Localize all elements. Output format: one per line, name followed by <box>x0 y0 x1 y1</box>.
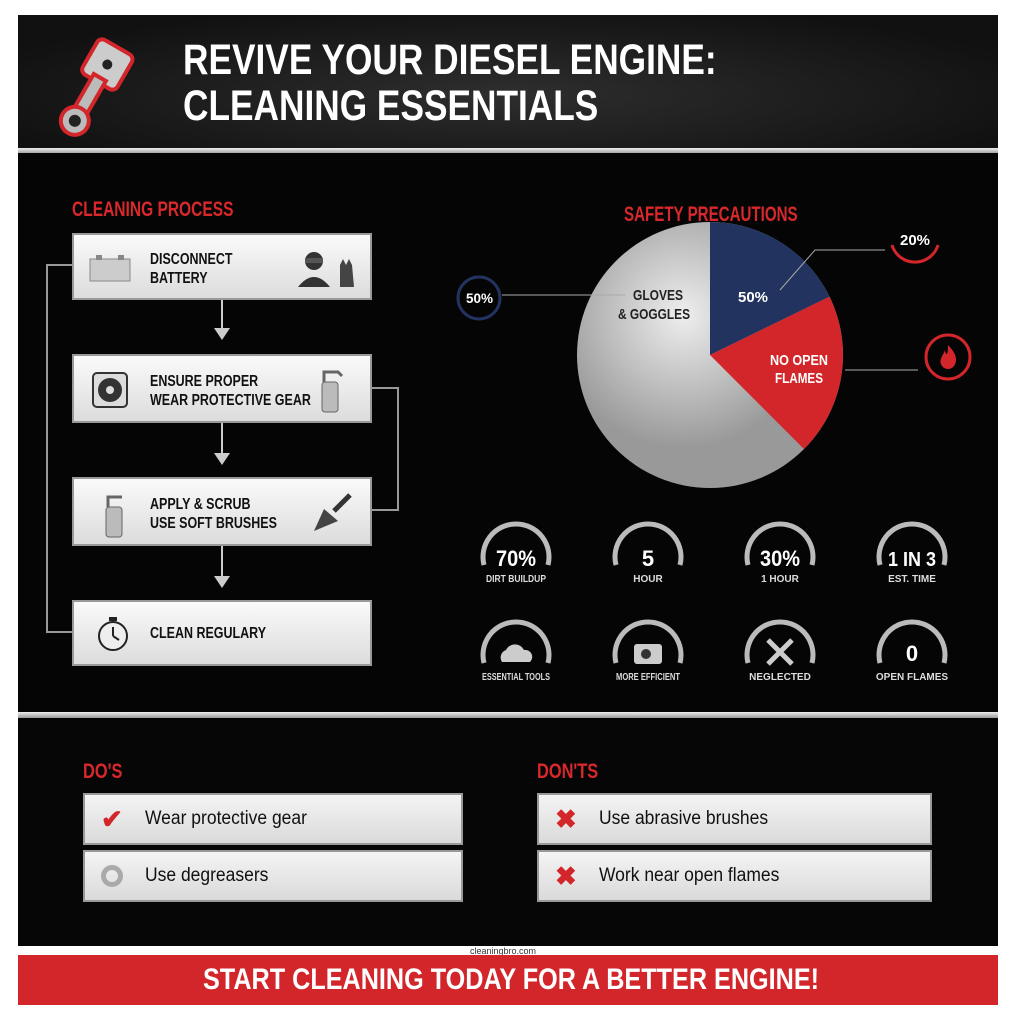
gauges: 1 IN 3 <box>888 549 936 571</box>
do 2 <box>83 850 463 902</box>
dont 2 <box>537 850 932 902</box>
pie chart: FLAMES <box>775 370 823 387</box>
main panel <box>18 153 998 713</box>
gauges: HOUR <box>633 574 663 585</box>
icon: piston <box>58 37 134 137</box>
pie chart: 50% <box>738 289 768 306</box>
pie chart: 50% <box>466 290 494 306</box>
step 3: USE SOFT BRUSHES <box>150 515 277 532</box>
do 2: Use degreasers <box>145 865 268 886</box>
step 1: DISCONNECT <box>150 251 233 268</box>
do 1 <box>83 793 463 845</box>
step 1: BATTERY <box>150 270 208 287</box>
heading: don'ts: DON'TS <box>537 760 598 783</box>
watermark: cleaningbro.com <box>470 946 536 956</box>
step 1 <box>72 233 372 300</box>
gauges: DIRT BUILDUP <box>486 574 546 585</box>
gauges: 1 HOUR <box>761 574 800 585</box>
dont 2: ✖ <box>555 861 577 891</box>
heading: safety precautions: SAFETY PRECAUTIONS <box>624 203 798 226</box>
gauges: ESSENTIAL TOOLS <box>482 672 550 683</box>
pie chart <box>456 222 972 488</box>
gauges <box>480 522 948 683</box>
gauges: 30% <box>760 546 800 571</box>
do 1: Wear protective gear <box>145 808 307 829</box>
step 2: WEAR PROTECTIVE GEAR <box>150 392 311 409</box>
step 3: APPLY & SCRUB <box>150 496 251 513</box>
step 3 <box>72 477 372 546</box>
dont 2: Work near open flames <box>599 865 779 886</box>
footer banner <box>18 955 998 1005</box>
dont 1: ✖ <box>555 804 577 834</box>
gauges: OPEN FLAMES <box>876 672 948 683</box>
pie chart: 20% <box>900 232 930 249</box>
gauges: MORE EFFICIENT <box>616 672 680 683</box>
dont 1 <box>537 793 932 845</box>
title: CLEANING ESSENTIALS <box>183 82 598 130</box>
heading: do's: DO'S <box>83 760 122 783</box>
gauges: 5 <box>642 546 654 571</box>
step 2 <box>72 354 372 423</box>
lower panel <box>18 718 998 946</box>
heading: cleaning process: CLEANING PROCESS <box>72 198 233 221</box>
flow connectors <box>46 264 399 633</box>
gauges: 0 <box>906 641 918 666</box>
header <box>18 15 998 148</box>
gauges: EST. TIME <box>888 574 936 585</box>
step 4 <box>72 600 372 666</box>
footer banner: START CLEANING TODAY FOR A BETTER ENGINE! <box>203 963 819 996</box>
gauges: NEGLECTED <box>749 672 811 683</box>
step 2: ENSURE PROPER <box>150 373 258 390</box>
pie chart: NO OPEN <box>770 352 828 369</box>
pie chart: GLOVES <box>633 287 683 304</box>
gauges: 70% <box>496 546 536 571</box>
title <box>183 36 717 130</box>
dont 1: Use abrasive brushes <box>599 808 768 829</box>
pie chart: & GOGGLES <box>618 306 690 323</box>
step 4: CLEAN REGULARY <box>150 625 266 642</box>
do 1: ✔ <box>101 804 123 834</box>
title: REVIVE YOUR DIESEL ENGINE: <box>183 36 717 84</box>
